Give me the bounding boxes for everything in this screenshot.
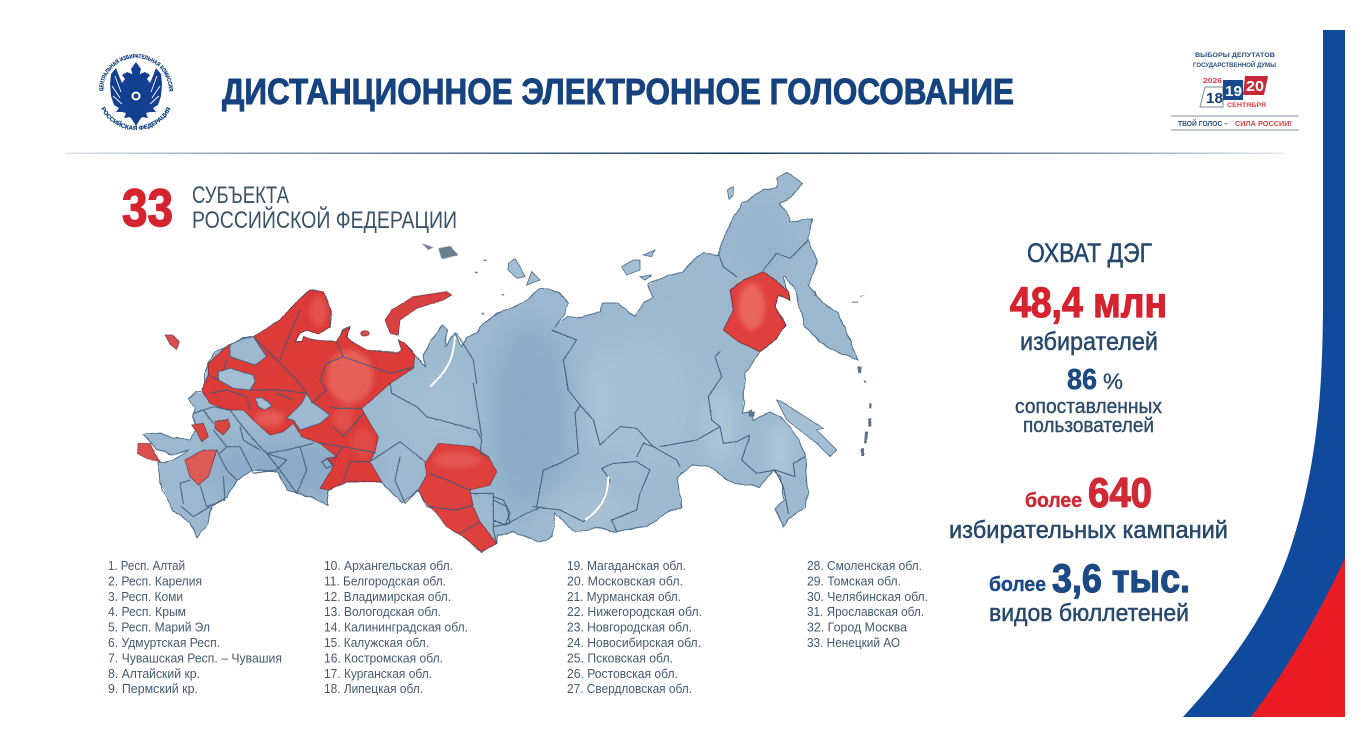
election badge: СИЛА РОССИИ! <box>1235 121 1292 128</box>
list of regions: column 3 <box>567 559 702 696</box>
Arctic islands <box>508 187 733 285</box>
list of regions: column 1 <box>108 559 282 696</box>
Magadan region <box>723 272 790 352</box>
list of regions: column 2: 16. Костромская обл. <box>324 651 443 665</box>
list of regions: column 4: 29. Томская обл. <box>807 574 901 588</box>
list of regions: column 1: 8. Алтайский кр. <box>108 667 200 681</box>
logo: election commission emblem: РОССИЙСКАЯ ФЕДЕРАЦИЯ <box>101 106 171 130</box>
list of regions: column 3: 19. Магаданская обл. <box>567 559 686 573</box>
list of regions: column 1: 7. Чувашская Респ. – Чувашия <box>108 651 282 665</box>
list of regions: column 3: 27. Свердловская обл. <box>567 682 692 696</box>
list of regions: column 3: 22. Нижегородская обл. <box>567 605 702 619</box>
map of Russia <box>120 160 880 560</box>
coastline <box>143 172 858 552</box>
statistics panel: coverage: избирателей <box>1020 328 1158 356</box>
Kuril islands and small isles <box>748 290 872 456</box>
list of regions: column 4 <box>807 559 928 650</box>
election badge: 20 <box>1246 78 1264 95</box>
statistics panel: campaigns and ballots: видов бюллетеней <box>989 600 1189 627</box>
Franz Josef Land <box>422 243 504 315</box>
matched users figure: 86 <box>1067 364 1097 396</box>
list of regions: column 2: 13. Вологодская обл. <box>324 605 441 619</box>
statistics panel: coverage: пользователей <box>1023 415 1154 437</box>
Sakhalin <box>777 400 837 457</box>
non-participating pockets <box>230 337 267 365</box>
main red area <box>202 290 415 490</box>
list of regions: column 1: 2. Респ. Карелия <box>108 574 202 588</box>
list of regions: column 4: 33. Ненецкий АО <box>807 636 900 650</box>
list of regions: column 2: 17. Курганская обл. <box>324 667 432 681</box>
Kolguev island <box>361 331 369 336</box>
statistics panel: campaigns and ballots: 3,6 тыс. <box>1052 557 1190 601</box>
Lake Baikal <box>585 477 608 520</box>
eagle <box>110 62 162 126</box>
statistics panel: campaigns and ballots: 640 <box>1088 469 1152 516</box>
Gulf of Ob <box>430 337 455 387</box>
eastern regions <box>493 187 872 532</box>
heading: 33 subjects <box>122 179 457 238</box>
Kaliningrad <box>165 335 179 349</box>
list of regions: column 4: 31. Ярославская обл. <box>807 605 924 619</box>
list of regions: column 2 <box>324 559 468 696</box>
decorative tricolor ribbon <box>1183 30 1345 717</box>
heading: 33 subjects: СУБЪЕКТА <box>192 182 289 209</box>
Novaya Zemlya <box>385 292 452 335</box>
regional borders, east <box>493 240 808 532</box>
list of regions: column 2: 15. Калужская обл. <box>324 636 429 650</box>
watercolour washes on red <box>255 297 480 468</box>
list of regions: column 1: 4. Респ. Крым <box>108 605 186 619</box>
statistics panel: coverage: сопоставленных <box>1015 396 1162 418</box>
logo: election commission emblem <box>98 54 174 130</box>
list of regions: column 3: 21. Мурманская обл. <box>567 590 681 604</box>
list of regions: column 1: 3. Респ. Коми <box>108 590 183 604</box>
statistics panel: coverage: % <box>1103 369 1123 394</box>
statistics panel: campaigns and ballots: избирательных кампаний <box>949 517 1228 544</box>
election badge: 19 <box>1225 83 1242 100</box>
list of regions: column 2: 12. Владимирская обл. <box>324 590 451 604</box>
list of regions: column 1: 9. Пермский кр. <box>108 682 198 696</box>
statistics panel: coverage <box>1010 238 1167 437</box>
list of regions: column 3: 23. Новгородская обл. <box>567 621 692 635</box>
Crimea <box>137 443 160 462</box>
list of regions: column 4: 32. Город Москва <box>807 621 907 635</box>
emblem ring text: ЦЕНТРАЛЬНАЯ ИЗБИРАТЕЛЬНАЯ КОМИССИЯ <box>98 54 174 92</box>
Tomsk, Novosibirsk, Altai <box>418 443 497 552</box>
ballots figure: более <box>989 574 1046 596</box>
election badge: 18 <box>1206 90 1223 107</box>
list of regions: column 1: 6. Удмуртская Респ. <box>108 636 220 650</box>
election badge: ГОСУДАРСТВЕННОЙ ДУМЫ <box>1193 61 1276 69</box>
list of regions: column 1: 5. Респ. Марий Эл <box>108 621 210 635</box>
title: ДИСТАНЦИОННОЕ ЭЛЕКТРОННОЕ ГОЛОСОВАНИЕ <box>222 71 1014 112</box>
list of regions: column 3: 25. Псковская обл. <box>567 651 673 665</box>
list of regions: column 3: 20. Московская обл. <box>567 574 683 588</box>
panel heading: ОХВАТ ДЭГ <box>1027 238 1152 268</box>
statistics panel: campaigns and ballots <box>949 469 1228 627</box>
list of regions: column 1: 1. Респ. Алтай <box>108 559 185 573</box>
western regions in red <box>137 243 510 552</box>
election badge: ВЫБОРЫ ДЕПУТАТОВ <box>1195 52 1275 59</box>
campaigns figure: более <box>1025 490 1082 512</box>
election badge: ТВОЙ ГОЛОС – <box>1178 119 1228 128</box>
election badge <box>1171 52 1299 130</box>
regional borders, west <box>208 310 413 482</box>
heading: 33 subjects: 33 <box>122 179 173 238</box>
election badge: 2026 <box>1203 78 1222 85</box>
list of regions: column 2: 10. Архангельская обл. <box>324 559 453 573</box>
heading: 33 subjects: РОССИЙСКОЙ ФЕДЕРАЦИИ <box>192 206 457 234</box>
list of regions: column 2: 14. Калининградская обл. <box>324 621 468 635</box>
list of regions: column 2: 18. Липецкая обл. <box>324 682 423 696</box>
election badge: СЕНТЯБРЯ <box>1227 102 1266 109</box>
list of regions: column 2: 11. Белгородская обл. <box>324 574 446 588</box>
list of regions: column 4: 30. Челябинская обл. <box>807 590 928 604</box>
list of regions: column 3: 26. Ростовская обл. <box>567 667 678 681</box>
Belgorod, Lipetsk, Rostov <box>192 423 208 442</box>
voters figure: 48,4 млн <box>1010 279 1167 327</box>
land: non-participating regions <box>143 172 857 552</box>
list of regions: column 3: 24. Новосибирская обл. <box>567 636 701 650</box>
list of regions: column 4: 28. Смоленская обл. <box>807 559 922 573</box>
